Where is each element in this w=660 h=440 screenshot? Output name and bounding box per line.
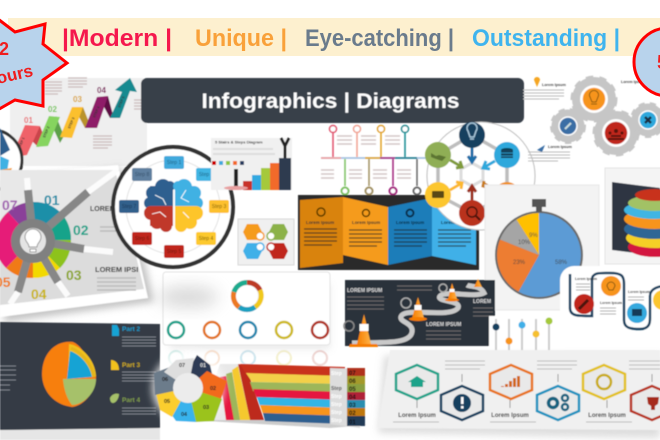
step labels: STEP 4 [92, 106, 101, 118]
wheel: 07 [179, 363, 185, 369]
panel: step wheel bars: Step [331, 410, 342, 416]
panel: sphere dark [0, 322, 160, 440]
panel: road [344, 279, 495, 347]
panel: steps arrow: 04 [97, 86, 106, 95]
panel: step wheel bars: 05 [349, 387, 356, 393]
panel: step wheel bars: 06 [349, 379, 356, 385]
panel: road: LOREM IPSUM [426, 322, 461, 328]
panel: left ring fragment [0, 128, 22, 190]
banner words: Outstanding | [472, 25, 620, 52]
banner strip [8, 18, 660, 56]
step boxes [119, 156, 229, 258]
panel: numbered wheel [0, 165, 154, 322]
panel: pie chart [485, 185, 599, 310]
panel: steps arrow [10, 78, 147, 166]
panel: numbered wheel: 03 [66, 267, 82, 283]
panel: step wheel bars: 07 [349, 371, 356, 377]
panel: step wheel bars: Step [331, 371, 342, 377]
step labels: STEP 3 [67, 117, 76, 129]
panel: sphere dark: Part 4 [122, 397, 140, 404]
panel: orange blue fold: Lorem Ipsum [396, 220, 424, 225]
step boxes: Step 5 [167, 249, 181, 255]
panel: S curve icons: Lorem Ipsum [575, 277, 597, 281]
panel: timeline [321, 126, 428, 194]
banner words: Eye-catching | [305, 25, 454, 52]
panel: orange blue fold [298, 195, 479, 270]
panel: round hexagons [238, 219, 294, 265]
panel: stairs diagram [211, 138, 292, 190]
panel: orange blue fold: Lorem Ipsum [441, 220, 469, 225]
panel: steps arrow: 02 [48, 105, 57, 114]
panel: numbered wheel: 07 [2, 197, 18, 213]
pie: 58% [555, 260, 568, 266]
step labels: STEP 5 [117, 96, 126, 108]
step boxes: Step 1 [167, 160, 181, 166]
panel: numbered wheel: LOREM [90, 206, 115, 213]
panel: numbered wheel: LOREM IPSI [95, 265, 138, 274]
pie: 9% [529, 233, 538, 239]
hex icons [396, 365, 660, 420]
wheel: 03 [203, 405, 209, 411]
step labels: STEP 2 [42, 126, 51, 138]
round badge [634, 28, 660, 96]
panel: step wheel bars: 02 [349, 411, 356, 417]
panel: step wheel bars: 03 [349, 403, 356, 409]
panel: gears: Lorem Ipsum [621, 80, 645, 84]
panel: donut rings [158, 272, 330, 365]
wheel: 06 [162, 377, 168, 383]
panel: road: LOREM IPSUM [347, 288, 382, 294]
step labels [17, 96, 126, 149]
step boxes: Step 4 [199, 236, 213, 242]
panel: hexagon row [378, 350, 660, 438]
panel: S curve icons: Lorem Ipsum [600, 301, 622, 305]
panel: steps arrow: 01 [24, 116, 33, 125]
icon: brain [144, 179, 203, 232]
panel: gears [523, 77, 660, 161]
panel: orange blue fold: Lorem Ipsum [306, 220, 334, 225]
panel: stairs diagram: 5 Stairs & Steps Diagram [215, 140, 263, 144]
panel: hexagon row: Lorem Ipsum [588, 413, 626, 419]
panel: step wheel bars: Step [331, 402, 342, 408]
panel: sliders [489, 316, 564, 352]
step boxes: Step 8 [135, 172, 149, 178]
panel: step wheel bars: Step [331, 418, 342, 424]
panel: hexagon row: Lorem Ipsum [398, 413, 436, 419]
panel: step wheel bars: Step [331, 386, 342, 392]
icon: cones [349, 279, 482, 347]
panel: header: Infographics | Diagrams [202, 89, 460, 113]
panel: sphere dark: Part 3 [122, 362, 140, 369]
burst badge [0, 16, 67, 112]
panel: S curve icons [560, 266, 660, 330]
panel: road: LOREM [473, 299, 491, 305]
step boxes: Step 3 [212, 204, 226, 210]
panel: numbered wheel: 01 [44, 192, 60, 208]
panel: step wheel bars: 01 [349, 420, 356, 426]
panel: layered stack [605, 168, 660, 264]
banner words [62, 25, 620, 52]
wheel: 04 [181, 412, 188, 418]
step boxes: Step [199, 172, 209, 178]
panel: S curve icons: Lorem Ipsum [628, 290, 650, 294]
panel: orange blue fold: Lorem Ipsum [352, 220, 380, 225]
panel: step wheel bars: Step [331, 394, 342, 400]
panel: brain diagram [113, 147, 233, 267]
panel: step wheel bars [152, 352, 366, 428]
step boxes: Step 6 [135, 236, 149, 242]
panel: header [141, 78, 524, 123]
panel: step wheel bars: 04 [349, 395, 356, 401]
banner words: |Modern | [62, 25, 172, 52]
donut [233, 282, 261, 310]
step labels: STEP 1 [17, 137, 26, 149]
panel: gears: Lorem Ipsum [542, 83, 566, 87]
panel: numbered wheel: 02 [73, 222, 89, 238]
banner words: Unique | [195, 25, 287, 52]
step boxes: Step 7 [122, 204, 136, 210]
panel: hexagon row: Lorem Ipsum [491, 413, 529, 419]
pie: 23% [513, 260, 526, 266]
wheel: 01 [200, 363, 206, 369]
pie [495, 199, 583, 299]
wheel: 02 [210, 386, 216, 392]
pie: 10% [518, 240, 531, 246]
panel: sphere dark: Part 2 [122, 326, 140, 333]
panel: steps arrow: 03 [73, 95, 82, 104]
wheel [152, 352, 227, 424]
panel: hexagon network [425, 122, 535, 230]
sphere [42, 342, 96, 407]
wheel: 05 [164, 399, 170, 405]
panel: numbered wheel: 04 [31, 286, 47, 302]
panel: gears: Lorem Ipsum [548, 145, 572, 149]
